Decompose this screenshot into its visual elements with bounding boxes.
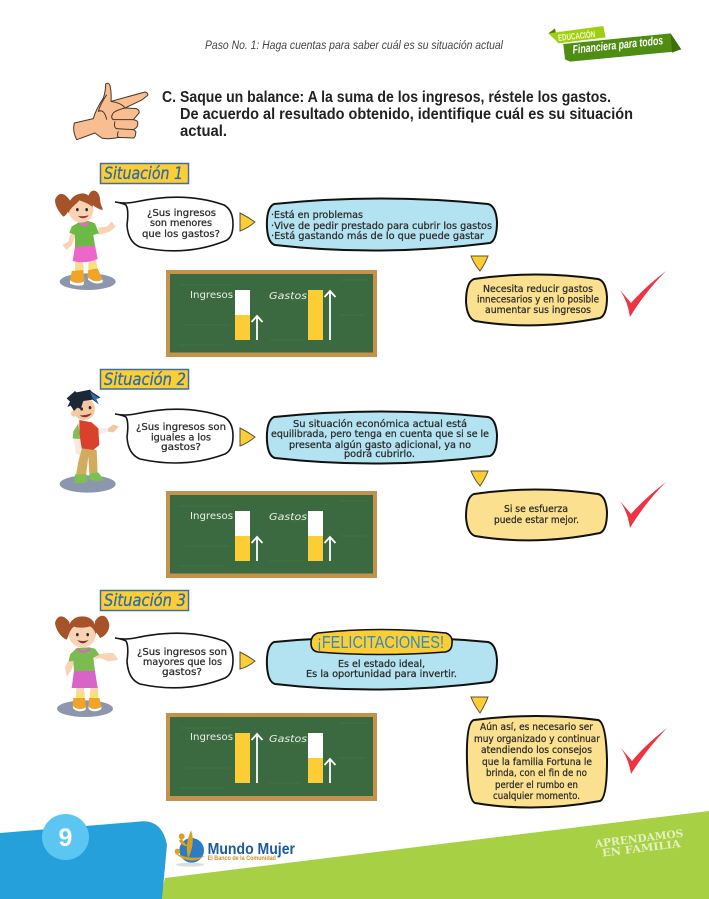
ribbon logo: Educación Financiera para todos	[548, 26, 681, 62]
blue bubble: situation description 2: podrá cubrirlo.	[344, 448, 415, 460]
chalkboard chart 1	[166, 270, 377, 357]
yellow box: advice 3: perder el rumbo en	[495, 780, 578, 791]
icon: pointing hand	[74, 83, 148, 140]
character: boy with red vest	[60, 390, 119, 493]
footer: green band	[160, 811, 709, 899]
bar: ingresos	[235, 511, 262, 561]
speech bubble: question 2	[115, 409, 233, 463]
instruction heading: De acuerdo al resultado obtenido, identifique cuál es su situación	[180, 106, 633, 123]
yellow box: advice 3: atendiendo los consejos	[481, 745, 592, 756]
blue bubble: felicitaciones: Es el estado ideal,	[338, 659, 425, 670]
arrow: down	[471, 697, 488, 713]
icon: red check	[620, 482, 666, 528]
chalkboard chart 2: Gastos	[269, 512, 307, 523]
page number: 9	[59, 824, 72, 852]
chalkboard chart 1: Ingresos	[190, 290, 233, 301]
instruction heading: Saque un balance: A la suma de los ingresos, réstele los gastos.	[180, 89, 611, 106]
character: girl facing front	[55, 616, 118, 717]
chalkboard chart 2: Ingresos	[190, 511, 233, 522]
blue bubble: situation description 1: ·Está en problemas	[271, 209, 363, 221]
instruction heading: actual.	[180, 123, 227, 140]
bar: ingresos	[235, 733, 262, 783]
logo: Mundo Mujer	[174, 830, 295, 867]
speech bubble: question 3: gastos?	[162, 667, 202, 678]
arrow: right	[240, 652, 255, 669]
yellow box: advice 3: Aún así, es necesario ser	[480, 721, 593, 733]
yellow box: advice 2: Si se esfuerza	[504, 504, 568, 515]
panel: situación 2	[60, 370, 666, 578]
arrow: right	[240, 213, 255, 231]
page header text: Paso No. 1: Haga cuentas para saber cuál es su situación actual	[205, 40, 503, 52]
speech bubble: question 1: son menores	[150, 218, 212, 229]
bar: gastos	[308, 290, 336, 340]
footer text: Aprendamos en familia: APRENDAMOS	[593, 828, 684, 851]
blue bubble: situation description 2: Su situación económica actual está	[293, 418, 467, 430]
blue bubble: situation description 2: equilibrada, pero tenga en cuenta que si se le	[271, 429, 489, 440]
yellow box: advice 3: que la familia Fortuna le	[482, 757, 592, 768]
blue bubble: situation description 1	[267, 198, 497, 251]
instruction heading	[162, 89, 633, 140]
bar: ingresos	[235, 290, 262, 340]
logo: Mundo Mujer: Mundo Mujer	[208, 841, 295, 858]
character: girl with pigtails	[55, 191, 116, 290]
icon: red check	[620, 271, 666, 317]
blue bubble: felicitaciones	[267, 630, 497, 690]
bar: gastos	[308, 511, 336, 561]
yellow box: advice 3	[467, 716, 607, 808]
footer: blue tab	[0, 821, 167, 899]
page number	[42, 814, 89, 860]
speech bubble: question 3: ¿Sus ingresos son	[137, 647, 227, 658]
title pill: ¡FELICITACIONES!	[311, 630, 452, 654]
panel: situación 3	[55, 590, 667, 808]
blue bubble: situation description 1: ·Está gastando más de lo que puede gastar	[271, 230, 484, 242]
heading: Situación 1: Situación 1	[104, 164, 183, 183]
speech bubble: question 2: ¿Sus ingresos son	[136, 422, 226, 433]
speech bubble: question 3	[115, 633, 233, 688]
yellow box: advice 1	[466, 274, 607, 325]
speech bubble: question 1: que los gastos?	[142, 229, 220, 240]
blue bubble: situation description 2: presenta algún gasto adicional, ya no	[289, 439, 471, 451]
yellow box: advice 1: aumentar sus ingresos	[485, 305, 591, 316]
speech bubble: question 1: ¿Sus ingresos	[147, 208, 216, 219]
chalkboard chart 3: Gastos	[269, 734, 307, 745]
yellow box: advice 2	[466, 490, 607, 540]
yellow box: advice 1: Necesita reducir gastos	[483, 284, 593, 295]
chalkboard chart 3: Ingresos	[190, 732, 233, 743]
blue bubble: situation description 2	[267, 412, 497, 464]
yellow box: advice 3: brinda, con el fin de no	[486, 768, 587, 779]
panel: situación 1	[55, 164, 666, 357]
speech bubble: question 1	[115, 197, 233, 251]
speech bubble: question 2: iguales a los	[151, 432, 211, 444]
instruction heading: C.	[162, 89, 176, 106]
chalkboard chart 3	[166, 713, 377, 801]
footer text: Aprendamos en familia	[593, 828, 685, 861]
speech bubble: question 2: gastos?	[161, 442, 201, 453]
icon: red check	[621, 728, 667, 774]
bar: gastos	[308, 733, 336, 783]
blue bubble: situation description 1: ·Vive de pedir prestado para cubrir los gastos	[271, 221, 492, 232]
yellow box: advice 3: muy organizado y continuar	[474, 734, 600, 745]
chalkboard chart 2	[166, 491, 377, 578]
footer text: Aprendamos en familia: EN FAMILIA	[601, 838, 682, 860]
ribbon logo: Educación Financiera para todos: Financiera para todos	[572, 33, 664, 57]
heading: Situación 2: Situación 2	[104, 370, 186, 389]
logo: Mundo Mujer: El Banco de la Comunidad	[208, 856, 276, 862]
title pill: ¡FELICITACIONES!: ¡FELICITACIONES!	[317, 632, 444, 652]
heading: Situación 3: Situación 3	[104, 591, 186, 610]
yellow box: advice 2: puede estar mejor.	[494, 515, 579, 526]
yellow box: advice 1: innecesarios y en lo posible	[477, 294, 599, 306]
ribbon logo: Educación Financiera para todos: EDUCACIÓN	[557, 28, 596, 43]
blue bubble: felicitaciones: Es la oportunidad para invertir.	[306, 669, 457, 680]
speech bubble: question 3: mayores que los	[143, 657, 222, 668]
arrow: down	[471, 471, 488, 486]
yellow box: advice 3: cualquier momento.	[493, 791, 580, 802]
arrow: down	[471, 256, 488, 271]
chalkboard chart 1: Gastos	[269, 291, 307, 302]
arrow: right	[240, 428, 255, 446]
